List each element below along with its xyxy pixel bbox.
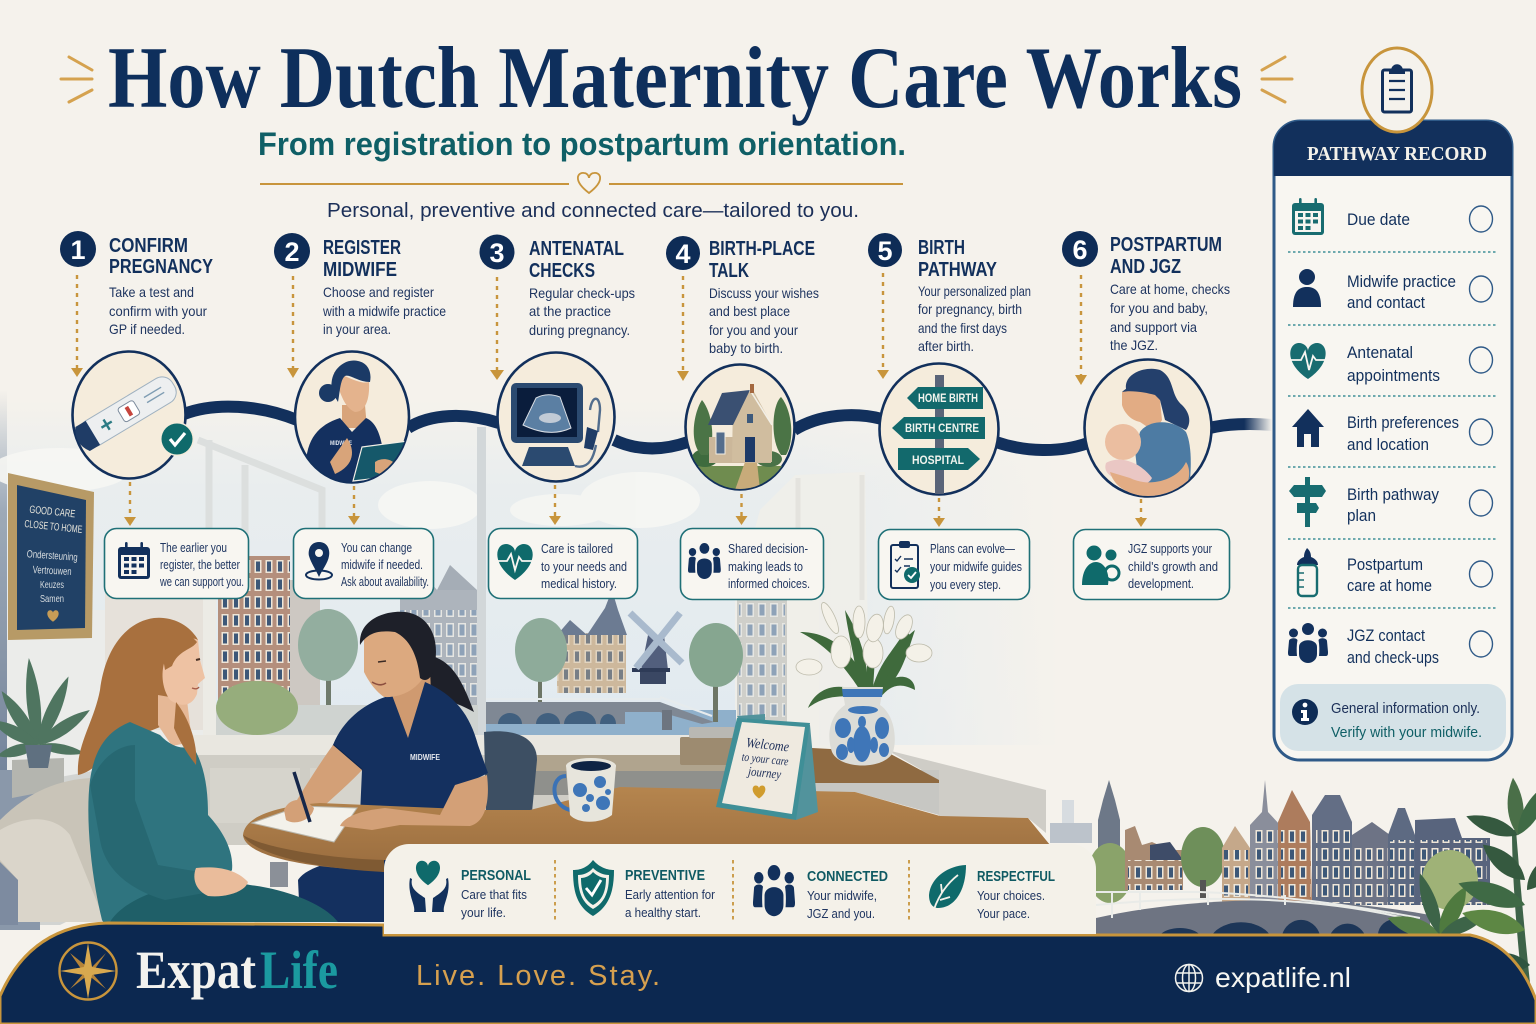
row: antenatal appointments: appointments [1347,367,1440,385]
welcome card: Welcome [745,736,790,755]
step 2: register midwife: REGISTER [323,237,401,259]
step 5: birth pathway: for pregnancy, birth [918,301,1022,317]
callout 6: JGZ supports your [1128,542,1212,556]
books [680,727,735,765]
step 4: birth-place talk: for you and your [709,322,798,338]
illustration: midwife: MIDWIFE [410,752,440,762]
circle: mother and baby [1084,360,1212,498]
callout 3 [488,528,638,598]
row: birth preferences and location: and location [1347,436,1429,454]
illustration: midwife [294,612,488,922]
step 2: register midwife: Choose and register [323,284,434,300]
step 1: confirm pregnancy: 1 [70,235,86,265]
circle: midwife with tablet [295,352,409,490]
row: due date [1292,198,1492,235]
callout 1: The earlier you [160,541,227,555]
step 6: postpartum and JGZ: and support via [1110,319,1197,335]
notebook, pen and midwife hands [252,772,488,842]
row: antenatal appointments: Antenatal [1347,344,1413,362]
wall sign: good care close to home: GOOD CARE [29,504,76,520]
value: respectful: Your choices. [977,889,1045,903]
value: connected [753,865,888,921]
step 2: register midwife: in your area. [323,321,391,337]
step 5: birth pathway: and the first days [918,320,1007,336]
step 4: birth-place talk: TALK [709,260,749,282]
step 4: birth-place talk [666,236,824,600]
row: birth preferences and location [1292,409,1492,454]
callout 1: we can support you. [159,575,244,589]
value: connected: JGZ and you. [807,907,875,921]
step 1: confirm pregnancy: GP if needed. [109,321,185,337]
value: preventive [573,860,715,920]
step 3: antenatal checks: during pregnancy. [529,322,630,338]
windmill [630,613,682,684]
value: preventive: Early attention for [625,888,715,902]
row: birth pathway plan: plan [1347,507,1376,525]
website: expatlife.nl [1215,962,1351,993]
row: midwife practice and contact [1293,269,1492,312]
left houses [105,590,205,730]
step 5: birth pathway: Your personalized plan [918,283,1031,299]
title: How Dutch Maternity Care Works [108,30,1242,127]
callout 4: Shared decision- [728,542,808,556]
wall sign: good care close to home [8,473,94,640]
step 1: confirm pregnancy: confirm with your [109,303,207,319]
note: general information [1280,684,1506,751]
illustration: armchair [0,778,105,925]
wall sign: good care close to home: Ondersteuning [26,548,78,564]
callout 2 [294,528,434,598]
callout 6: child's growth and [1128,560,1218,574]
step 1: confirm pregnancy: PREGNANCY [109,256,214,278]
midwife chair [484,731,537,812]
step 1: confirm pregnancy: Take a test and [109,284,194,300]
wall sign: good care close to home: Keuzes [40,579,64,591]
icon: clipboard badge [1362,48,1432,132]
row: JGZ contact and check-ups [1288,623,1492,667]
right foliage [1385,777,1536,1000]
step 4: birth-place talk: 4 [675,239,691,269]
callout 5 [878,530,1030,600]
circle: house [685,364,796,495]
tagline: Personal, preventive and connected care—tailored to you. [327,200,859,222]
callout 1: register, the better [160,558,240,572]
step 6: postpartum and JGZ: for you and baby, [1110,300,1208,316]
values band [384,844,1096,934]
value: connected: CONNECTED [807,869,888,885]
step 6: postpartum and JGZ: 6 [1072,235,1088,265]
wall sign: good care close to home: Samen [40,593,64,605]
step 4: birth-place talk: and best place [709,303,790,319]
footer band [0,923,1536,1024]
step 3: antenatal checks: at the practice [529,303,611,319]
value: respectful [929,865,1055,921]
step 2: register midwife: with a midwife practice [322,303,446,319]
shelf and grey wall at right [795,748,1046,833]
step 3: antenatal checks [480,234,638,598]
value: personal [409,861,531,920]
row: birth preferences and location: Birth preferences [1347,414,1459,432]
step 2: register midwife [274,233,446,598]
row: birth pathway plan [1289,477,1492,527]
illustration: table [243,787,1050,887]
value: connected: Your midwife, [807,889,877,903]
callout 2: midwife if needed. [341,558,423,572]
step 6: postpartum and JGZ: Care at home, checks [1110,281,1230,297]
step 3: antenatal checks: CHECKS [529,260,595,282]
step 5: birth pathway: PATHWAY [918,259,998,281]
row: due date: Due date [1347,211,1410,229]
divider with heart [260,173,903,193]
callout 2: You can change [341,541,412,555]
row: postpartum care at home: care at home [1347,577,1432,595]
circle: midwife with tablet: MIDWIFE [330,440,353,447]
step 1: confirm pregnancy: CONFIRM [109,235,188,257]
welcome card: to your care [741,750,790,768]
value: respectful: RESPECTFUL [977,869,1055,885]
background scene: window and Amsterdam view [0,390,1060,790]
callout 1 [104,528,248,598]
circle: ultrasound monitor [498,352,614,482]
sill and lower wall [0,735,740,930]
Amsterdam canal skyline [1050,777,1536,1000]
plant on the left [0,657,93,798]
row: JGZ contact and check-ups: and check-ups [1347,649,1439,667]
circle: signpost: HOSPITAL [912,453,964,467]
bridge [486,697,714,730]
mug [554,758,616,822]
step 5: birth pathway: BIRTH [918,237,965,259]
value: personal: PERSONAL [461,868,531,884]
step 4: birth-place talk: baby to birth. [709,340,783,356]
callout 5: you every step. [930,578,1001,592]
right pane [486,710,736,740]
row: antenatal appointments [1290,343,1492,385]
step 5: birth pathway: after birth. [918,338,974,354]
circle: signpost: BIRTH CENTRE [905,421,979,435]
callout 5: your midwife guides [930,560,1022,574]
wall sign: good care close to home: CLOSE TO HOME [24,518,83,536]
subtitle: From registration to postpartum orientation. [258,126,906,162]
slogan: Live. Love. Stay. [416,960,660,992]
value: respectful: Your pace. [977,907,1030,921]
row: JGZ contact and check-ups: JGZ contact [1347,627,1425,645]
panel: pathway record [1274,48,1512,760]
note: general information: General information only. [1331,701,1480,717]
logo: compass [60,942,116,1000]
callout 6 [1074,530,1230,600]
step 5: birth pathway [868,233,1031,600]
callout 4: informed choices. [728,577,810,591]
step 6: postpartum and JGZ: POSTPARTUM [1110,234,1222,256]
panel heading: PATHWAY RECORD [1307,143,1487,165]
note: general information: Verify with your midwife. [1331,725,1482,741]
value: personal: your life. [461,906,506,920]
step 1: confirm pregnancy [60,231,248,598]
illustration: pregnant woman [78,618,338,925]
value: preventive: PREVENTIVE [625,868,705,884]
timeline curve [184,407,1272,450]
callout 4: making leads to [728,560,803,574]
row: postpartum care at home: Postpartum [1347,556,1423,574]
callout 3: to your needs and [541,560,627,574]
callout 6: development. [1128,577,1194,591]
callout 4 [680,528,824,600]
step 3: antenatal checks: Regular check-ups [529,285,635,301]
callout 2: Ask about availability. [341,575,429,589]
step 6: postpartum and JGZ [1062,231,1230,600]
logo text: Expat [136,940,256,1000]
step 4: birth-place talk: BIRTH-PLACE [709,238,815,260]
step 2: register midwife: MIDWIFE [323,259,397,281]
step 3: antenatal checks: ANTENATAL [529,238,624,260]
value: preventive: a healthy start. [625,906,701,920]
wall sign: good care close to home: Vertrouwen [32,564,72,578]
step 3: antenatal checks: 3 [489,238,505,268]
welcome card: journey [746,763,782,782]
callout 3: medical history. [541,577,617,591]
row: postpartum care at home [1297,548,1492,596]
footer band: Life [260,940,338,1000]
callout 3: Care is tailored [541,542,613,556]
welcome card [716,714,818,820]
tulips in delft vase [796,600,932,766]
step 2: register midwife: 2 [284,237,300,267]
row: birth pathway plan: Birth pathway [1347,486,1440,504]
row: midwife practice and contact: Midwife practice [1347,273,1456,291]
callout 5: Plans can evolve— [930,542,1015,556]
step 4: birth-place talk: Discuss your wishes [709,285,819,301]
globe icon [1176,964,1202,992]
circle: signpost: HOME BIRTH [918,391,978,405]
circle: signpost [880,364,998,500]
step 6: postpartum and JGZ: AND JGZ [1110,256,1181,278]
row: midwife practice and contact: and contact [1347,294,1425,312]
step 6: postpartum and JGZ: the JGZ. [1110,337,1158,353]
circle: pregnancy test [71,352,194,478]
value: personal: Care that fits [461,888,527,902]
step 5: birth pathway: 5 [877,236,893,266]
